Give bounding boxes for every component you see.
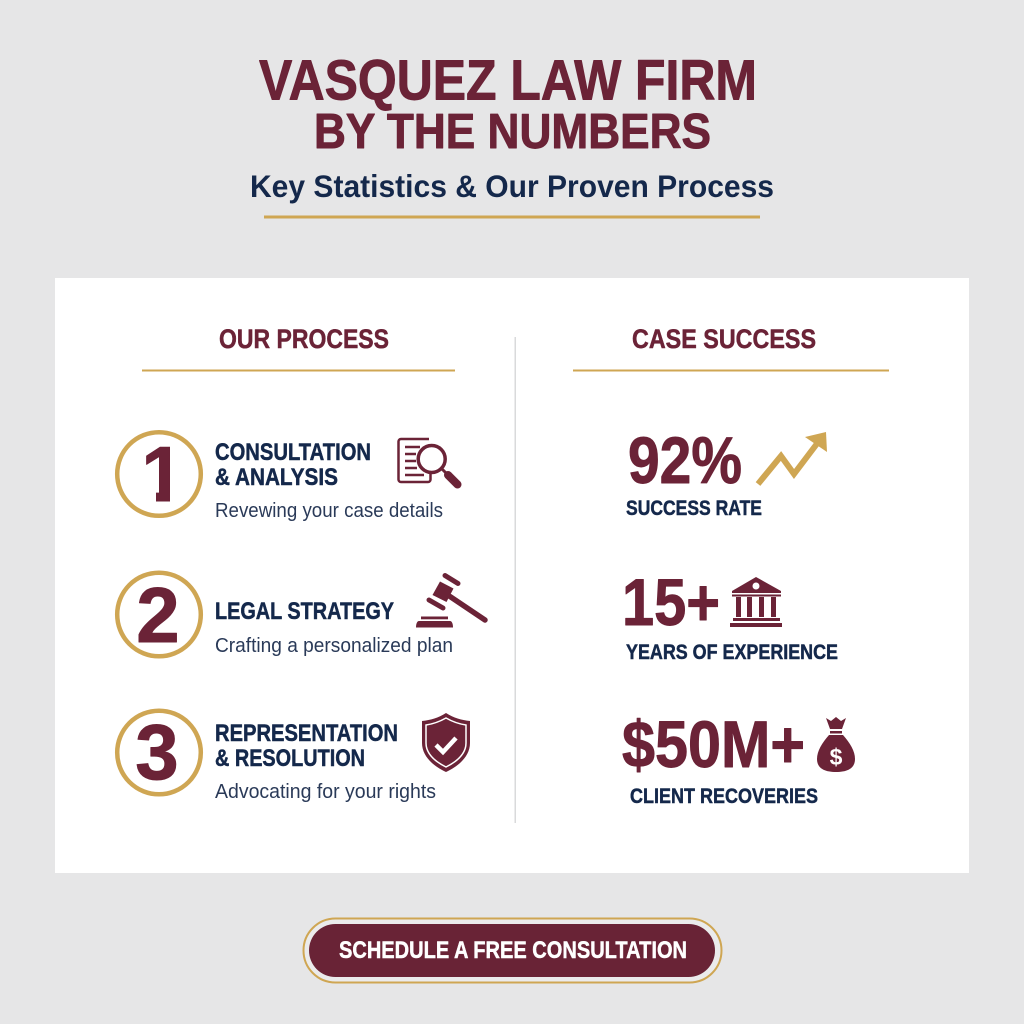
panel: main white card bbox=[55, 278, 969, 873]
step 3 number badge: 3 bbox=[135, 708, 179, 796]
icon: document and magnifier bbox=[398, 439, 458, 484]
step 2 number badge bbox=[117, 571, 201, 659]
heading: case success: CASE SUCCESS bbox=[632, 324, 816, 354]
stat label: SUCCESS RATE bbox=[626, 496, 762, 520]
call to action button bbox=[304, 918, 722, 982]
step 3 description: Advocating for your rights bbox=[215, 781, 436, 803]
step 2 bbox=[117, 571, 485, 659]
stat value $50M+: $50M+ bbox=[622, 707, 805, 781]
icon: money bag: $ bbox=[830, 744, 843, 770]
panel: case success bbox=[573, 324, 889, 808]
stat label: YEARS OF EXPERIENCE bbox=[626, 640, 838, 664]
button label: SCHEDULE A FREE CONSULTATION bbox=[339, 937, 687, 964]
icon: rising arrow bbox=[758, 432, 827, 484]
icon: money bag bbox=[817, 717, 855, 772]
step 3 number badge bbox=[117, 708, 201, 796]
icon: shield with check bbox=[422, 713, 470, 772]
stat value 92%: 92% bbox=[628, 423, 742, 497]
stat: years of experience bbox=[622, 565, 838, 664]
step 1 number badge bbox=[117, 430, 201, 518]
icon: courthouse bbox=[730, 577, 782, 627]
step 2 heading: LEGAL STRATEGY bbox=[215, 598, 394, 625]
step 2 description: Crafting a personalized plan bbox=[215, 635, 453, 657]
heading: our process: OUR PROCESS bbox=[219, 324, 389, 354]
step 3 bbox=[117, 708, 470, 803]
subtitle: Key Statistics & Our Proven Process bbox=[250, 168, 774, 204]
step 3 heading: REPRESENTATION bbox=[215, 720, 398, 747]
stat: client recoveries bbox=[622, 707, 855, 808]
step 1 heading: CONSULTATION bbox=[215, 439, 371, 466]
stat label: CLIENT RECOVERIES bbox=[630, 784, 818, 808]
title line 2: BY THE NUMBERS bbox=[314, 105, 711, 159]
step 1 description: Revewing your case details bbox=[215, 500, 443, 522]
step 3 heading: & RESOLUTION bbox=[215, 745, 365, 772]
panel: our process bbox=[117, 324, 485, 803]
step 2 number badge: 2 bbox=[136, 571, 180, 659]
stat value 15+: 15+ bbox=[622, 565, 720, 639]
header: title and subtitle bbox=[250, 48, 774, 218]
step 1 number badge: 1 bbox=[141, 430, 185, 518]
stat: success rate bbox=[626, 423, 827, 520]
step 1 heading: & ANALYSIS bbox=[215, 464, 338, 491]
title line 1: VASQUEZ LAW FIRM bbox=[259, 48, 757, 112]
step 1 bbox=[117, 430, 457, 522]
icon: gavel bbox=[416, 576, 485, 628]
